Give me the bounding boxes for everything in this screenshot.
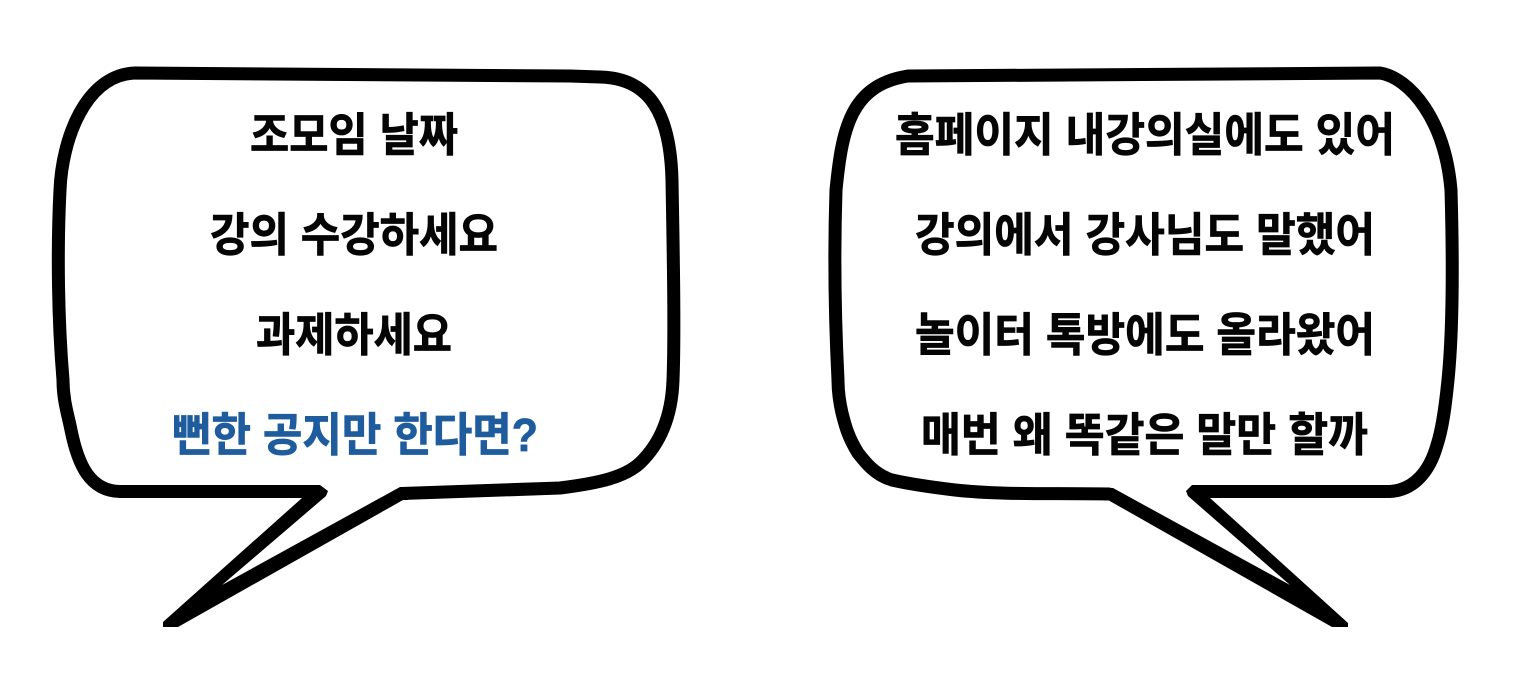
bubble outline: left [58, 73, 674, 494]
text block: left notices [172, 109, 538, 461]
line 3: 놀이터 톡방에도 올라왔어 [915, 309, 1375, 361]
tail: left [163, 485, 408, 627]
line 4: blue question: 뻔한 공지만 한다면? [172, 409, 538, 461]
tail: right [1104, 485, 1348, 627]
bubble outline: right [835, 73, 1452, 494]
line 2: 강의 수강하세요 [210, 209, 498, 261]
panel: left speech bubble [58, 73, 674, 627]
line 1: 조모임 날짜 [250, 109, 458, 161]
text block: right replies [895, 109, 1395, 461]
line 1: 홈페이지 내강의실에도 있어 [895, 109, 1395, 161]
line 3: 과제하세요 [256, 309, 452, 361]
panel: right speech bubble [835, 73, 1452, 627]
line 2: 강의에서 강사님도 말했어 [915, 209, 1375, 261]
line 4: 매번 왜 똑같은 말만 할까 [921, 409, 1368, 461]
